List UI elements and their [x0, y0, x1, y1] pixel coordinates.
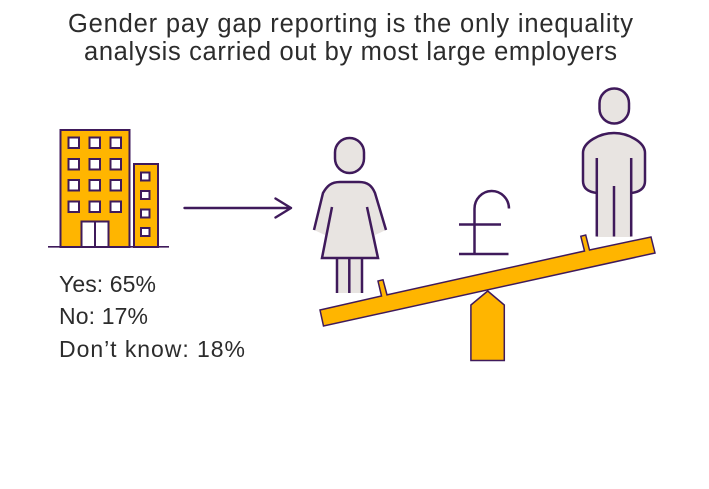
icon: woman [314, 138, 386, 293]
beam [320, 235, 655, 326]
icon: man [583, 88, 645, 237]
fulcrum [471, 291, 504, 360]
survey results: No: 17% [59, 303, 148, 329]
title: Gender pay gap reporting is the only inequality [68, 10, 633, 38]
survey results [59, 271, 245, 362]
arrow [184, 198, 291, 218]
survey results: Don’t know: 18% [59, 336, 245, 362]
main building [60, 130, 130, 247]
icon: pound sign [459, 191, 509, 254]
icon: office buildings [48, 130, 169, 247]
title [68, 10, 633, 66]
side building [134, 164, 158, 247]
title: analysis carried out by most large employers [84, 38, 617, 66]
seesaw [320, 235, 655, 360]
survey results: Yes: 65% [59, 271, 156, 297]
